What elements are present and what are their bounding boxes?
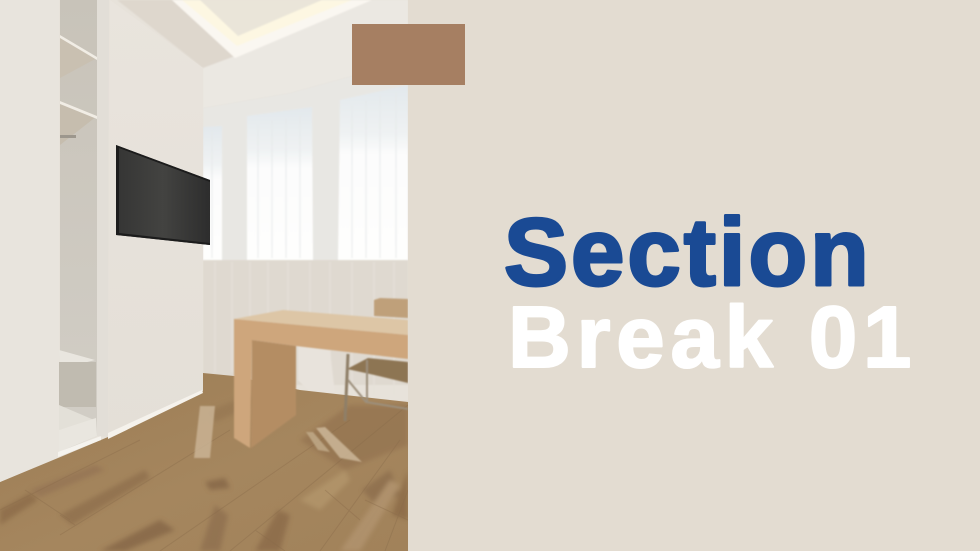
heading: [504, 199, 917, 386]
ceiling: [119, 0, 372, 67]
icon: wall-mounted TV: [116, 145, 210, 245]
panel: beige background: [408, 0, 980, 551]
floor: [0, 373, 408, 551]
heading line: Break 01: Break 01: [508, 289, 917, 386]
accent block: [352, 24, 465, 85]
wall with tv: [202, 164, 203, 392]
window wall with curtains: [203, 68, 408, 395]
chair: [345, 298, 408, 421]
left wardrobe panel: [0, 472, 24, 482]
panel: room photo: [0, 0, 408, 551]
heading line: Section: Section: [504, 199, 872, 306]
door stile: [100, 436, 101, 437]
open shelving unit: [58, 0, 101, 457]
wooden desk: [234, 310, 408, 448]
sunlight patches on floor: [194, 406, 362, 462]
